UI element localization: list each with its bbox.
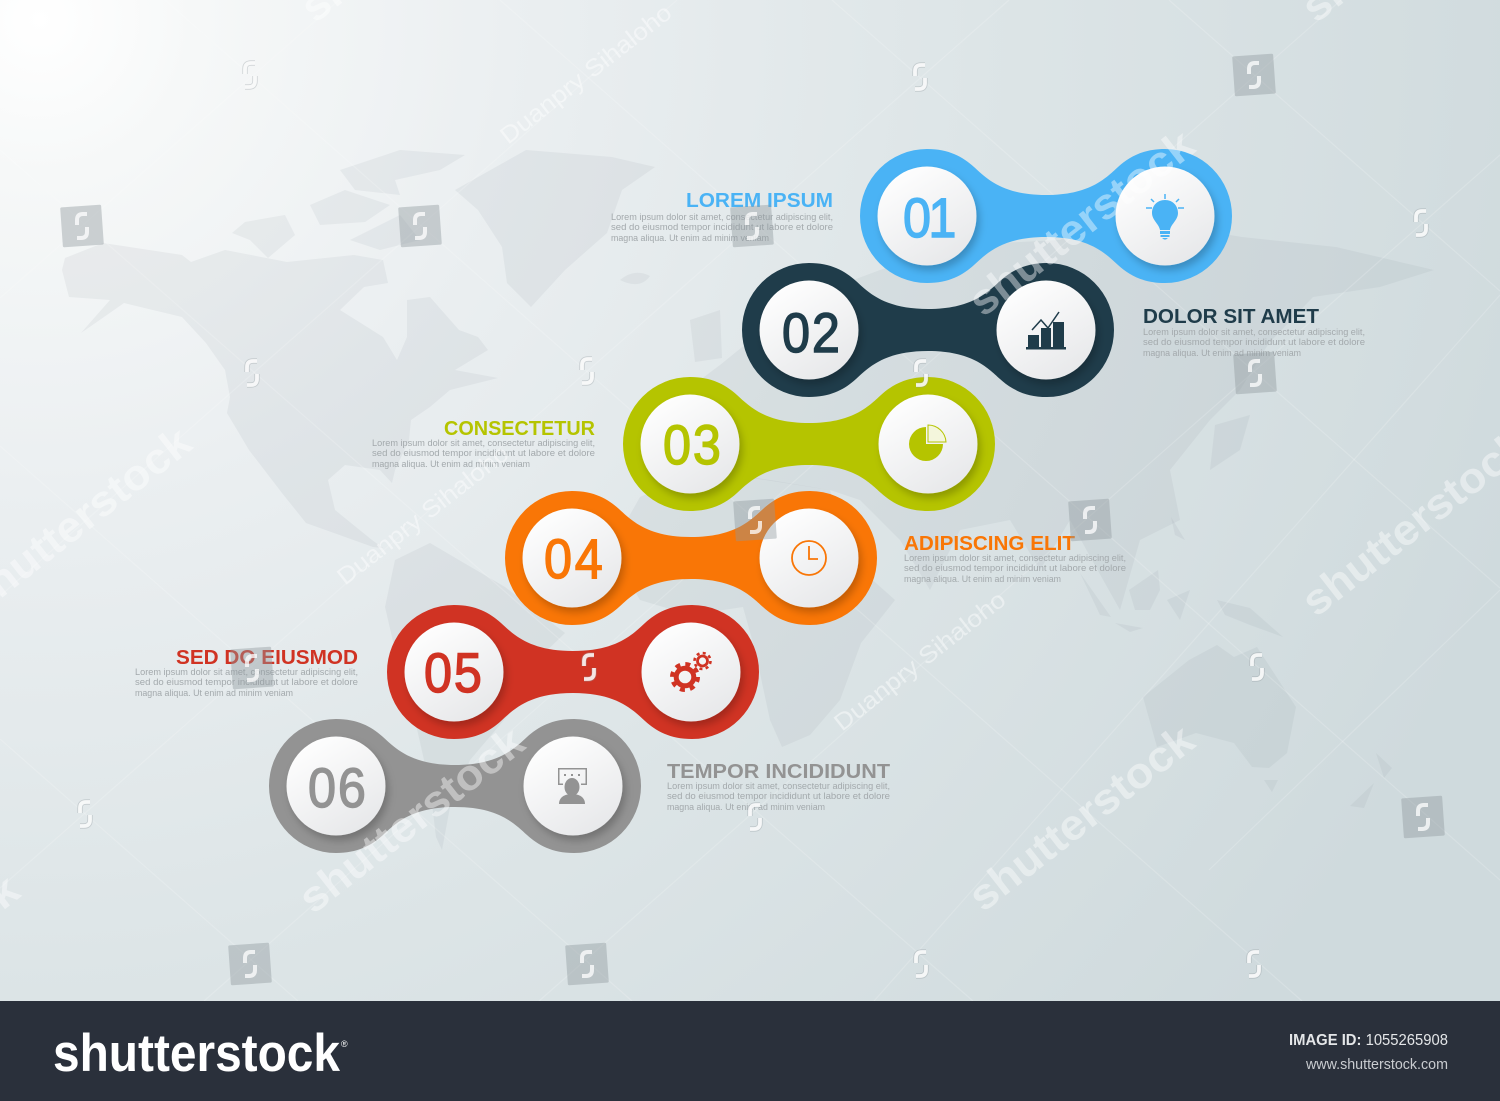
label: adipiscing elit: sed do eiusmod tempor incididunt ut labore et dolore bbox=[904, 563, 1126, 574]
label: sed do eiusmod: sed do eiusmod tempor incididunt ut labore et dolore bbox=[135, 677, 358, 688]
map: eurasia bbox=[630, 215, 1434, 610]
label: tempor incididunt: sed do eiusmod tempor incididunt ut labore et dolore bbox=[667, 791, 890, 802]
footer logo: shutterstock bbox=[53, 1024, 340, 1083]
step 04: orange bbox=[505, 491, 877, 625]
icon: gears bbox=[672, 653, 710, 690]
number 02: 02 bbox=[782, 303, 842, 365]
image id: IMAGE ID: 1055265908 bbox=[1289, 1032, 1448, 1049]
label: dolor sit amet: sed do eiusmod tempor incididunt ut labore et dolore bbox=[1143, 337, 1365, 348]
icon: light bulb bbox=[1146, 194, 1184, 240]
watermarks: Duanpry Sihaloho bbox=[829, 586, 1011, 737]
icon: presenter bbox=[558, 768, 587, 804]
label: dolor sit amet bbox=[1143, 305, 1365, 359]
number 05: 05 bbox=[424, 643, 484, 705]
map: north america bbox=[62, 243, 498, 548]
number 04: 04 bbox=[544, 529, 605, 591]
label: adipiscing elit: Lorem ipsum dolor sit amet, consectetur adipiscing elit, bbox=[904, 553, 1126, 564]
step 01: blue bbox=[860, 149, 1232, 283]
step 06: grey bbox=[269, 719, 641, 853]
label: lorem ipsum: Lorem ipsum dolor sit amet, consectetur adipiscing elit, bbox=[611, 212, 833, 223]
watermarks: shutterstock bbox=[960, 716, 1204, 921]
label: tempor incididunt bbox=[667, 760, 891, 813]
map: greenland and iceland bbox=[455, 150, 655, 307]
map: arctic islands bbox=[232, 150, 465, 258]
website: www.shutterstock.com bbox=[1305, 1057, 1448, 1073]
label: tempor incididunt: magna aliqua. Ut enim ad minim veniam bbox=[667, 802, 825, 813]
icon: clock bbox=[792, 541, 826, 575]
icon: pie chart bbox=[909, 425, 946, 461]
watermarks: Duanpry Sihaloho bbox=[332, 440, 514, 591]
label: sed do eiusmod: Lorem ipsum dolor sit amet, consectetur adipiscing elit, bbox=[135, 667, 358, 678]
label: sed do eiusmod bbox=[135, 646, 358, 699]
label: dolor sit amet: magna aliqua. Ut enim ad minim veniam bbox=[1143, 348, 1301, 359]
icon: bar chart bbox=[1026, 312, 1066, 350]
label: consectetur: Lorem ipsum dolor sit amet, consectetur adipiscing elit, bbox=[372, 438, 595, 449]
map: africa bbox=[610, 470, 895, 747]
label: adipiscing elit: ADIPISCING ELIT bbox=[904, 532, 1075, 555]
label: consectetur bbox=[372, 417, 595, 470]
step 02: navy bbox=[742, 263, 1114, 397]
label: lorem ipsum: magna aliqua. Ut enim ad minim veniam bbox=[611, 233, 769, 244]
label: consectetur: magna aliqua. Ut enim ad minim veniam bbox=[372, 459, 530, 470]
watermarks: Duanpry Sihaloho bbox=[495, 0, 677, 150]
label: lorem ipsum bbox=[611, 189, 833, 244]
world map bbox=[62, 150, 1434, 850]
watermarks: shutterstock bbox=[290, 718, 534, 923]
number 01: 01 bbox=[903, 188, 955, 250]
label: tempor incididunt: TEMPOR INCIDIDUNT bbox=[667, 760, 891, 783]
step 03: lime bbox=[623, 377, 995, 511]
map: australia and oceania bbox=[1080, 415, 1392, 808]
map: south america bbox=[385, 543, 565, 850]
label: lorem ipsum: sed do eiusmod tempor incididunt ut labore et dolore bbox=[611, 222, 833, 233]
label: sed do eiusmod: magna aliqua. Ut enim ad minim veniam bbox=[135, 688, 293, 699]
label: dolor sit amet: Lorem ipsum dolor sit amet, consectetur adipiscing elit, bbox=[1143, 327, 1365, 338]
footer bar bbox=[0, 1001, 1500, 1101]
label: lorem ipsum: LOREM IPSUM bbox=[686, 189, 833, 212]
step 05: red bbox=[387, 605, 759, 739]
number 03: 03 bbox=[663, 415, 723, 477]
label: dolor sit amet: DOLOR SIT AMET bbox=[1143, 305, 1319, 328]
number 06: 06 bbox=[308, 758, 368, 820]
label: tempor incididunt: Lorem ipsum dolor sit amet, consectetur adipiscing elit, bbox=[667, 781, 890, 792]
label: consectetur: sed do eiusmod tempor incididunt ut labore et dolore bbox=[372, 448, 595, 459]
label: adipiscing elit bbox=[904, 532, 1126, 585]
registered mark: ® bbox=[341, 1039, 348, 1049]
label: consectetur: CONSECTETUR bbox=[444, 417, 595, 440]
watermarks: shutterstock bbox=[960, 121, 1204, 326]
label: adipiscing elit: magna aliqua. Ut enim ad minim veniam bbox=[904, 574, 1061, 585]
label: sed do eiusmod: SED DO EIUSMOD bbox=[176, 646, 358, 669]
